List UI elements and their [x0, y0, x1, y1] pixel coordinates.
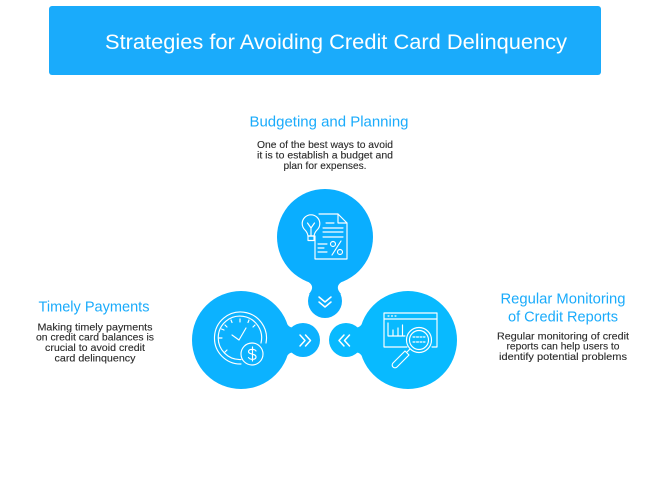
description: timely payments: card delinquency [54, 352, 136, 364]
heading: regular monitoring of credit reports: of Credit Reports [508, 308, 618, 326]
circle with connector [329, 291, 457, 389]
description: regular monitoring: reports can help users to [506, 340, 620, 352]
description: regular monitoring [497, 330, 629, 363]
circle with connector [277, 189, 373, 318]
description: regular monitoring: identify potential problems [499, 351, 627, 363]
node: timely payments [192, 291, 320, 389]
heading: regular monitoring of credit reports [500, 290, 626, 326]
icon: down chevrons [319, 297, 331, 307]
text block: timely payments [36, 298, 154, 364]
description: timely payments: crucial to avoid credit [45, 342, 145, 354]
node: regular monitoring [329, 291, 457, 389]
node: budgeting [277, 189, 373, 318]
description: budgeting and planning: plan for expenses. [284, 160, 366, 172]
text block: budgeting and planning [250, 114, 408, 172]
icon: browser chart and magnifier [384, 313, 437, 368]
heading: timely payments: Timely Payments [38, 298, 150, 316]
description: timely payments [36, 322, 154, 364]
description: budgeting and planning: it is to establish a budget and [257, 150, 393, 162]
heading: budgeting and planning: Budgeting and Planning [250, 114, 408, 130]
description: timely payments: on credit card balances is [36, 332, 154, 344]
heading: regular monitoring of credit reports: Regular Monitoring [500, 290, 626, 308]
description: budgeting and planning [257, 139, 393, 172]
icon: left chevrons [339, 335, 350, 346]
title banner [49, 6, 601, 75]
circle with connector [192, 291, 320, 389]
icon: light bulb and document [302, 214, 347, 259]
title: Strategies for Avoiding Credit Card Delinquency [105, 31, 568, 54]
description: timely payments: Making timely payments [38, 322, 152, 334]
icon: clock with dollar coin [214, 312, 266, 365]
description: regular monitoring: Regular monitoring of credit [497, 330, 629, 342]
icon: right chevrons [300, 335, 310, 346]
text block: regular monitoring [497, 290, 629, 363]
description: budgeting and planning: One of the best ways to avoid [257, 139, 393, 151]
